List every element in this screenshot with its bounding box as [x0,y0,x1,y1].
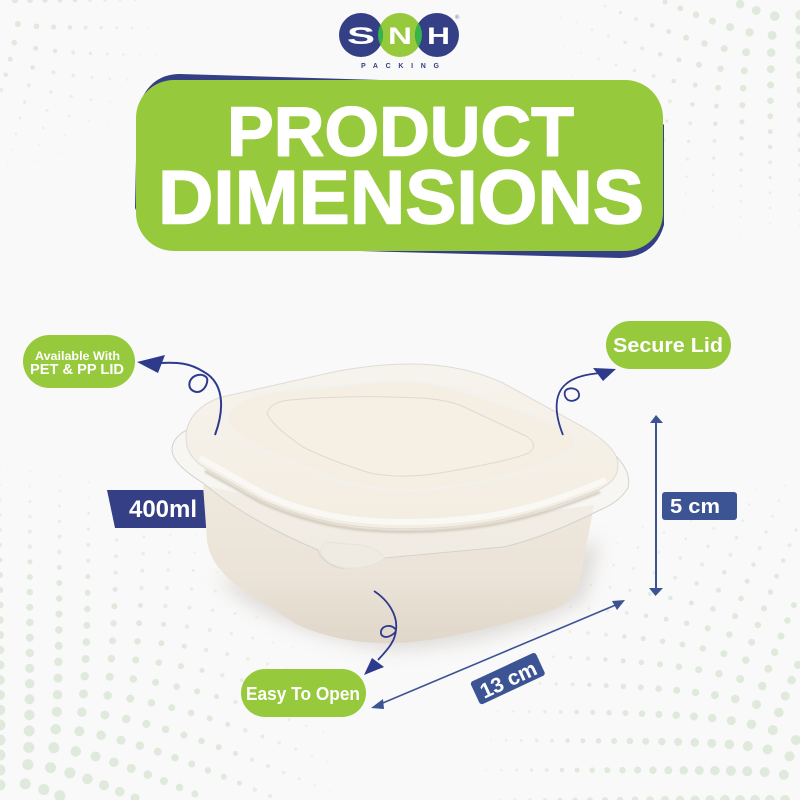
callout: Available With PET & PP LID: PET & PP LID [30,362,124,378]
badge: 400ml: 400ml [129,496,197,523]
logo: SNH Packing: H [427,23,450,50]
lid tab [320,542,385,568]
logo: SNH Packing: PACKING [361,63,440,70]
callout: Secure Lid: Secure Lid [613,335,723,357]
badge: 400ml [107,490,215,528]
callout: Available With PET & PP LID [23,335,135,388]
curly arrow: to PET & PP LID [137,355,221,435]
height arrow [649,415,663,596]
label: 5 cm [662,492,737,520]
title banner [135,74,664,258]
lid center panel [267,397,533,476]
lid flange [172,428,629,568]
callout: Easy To Open [241,669,366,717]
callout: Secure Lid [606,321,731,369]
width arrow [371,600,625,709]
banner navy backing [135,74,664,258]
title text: DIMENSIONS [158,156,644,240]
bowl shadow [215,540,600,650]
banner green panel [136,80,663,251]
callout: Easy To Open: Easy To Open [246,684,360,704]
label: 5 cm: 5 cm [670,496,720,518]
title text: PRODUCT [227,92,574,170]
curly arrow: to Secure Lid [557,368,616,435]
logo: SNH Packing: ® [455,14,460,21]
title text [158,92,644,240]
logo: SNH Packing: N [388,23,412,50]
callout: Available With PET & PP LID: Available With [35,351,120,363]
curly arrow: to Easy To Open [364,591,396,675]
bowl body [203,485,594,643]
lid raised ring [228,382,575,490]
logo: SNH Packing: S [347,23,375,50]
lid outer [186,364,618,529]
logo: SNH Packing [339,13,460,70]
lid rim shade [205,471,600,532]
product: bowl with lid [172,364,629,650]
label: 13 cm: 13 cm [477,657,541,703]
lid rim highlight [200,458,606,522]
